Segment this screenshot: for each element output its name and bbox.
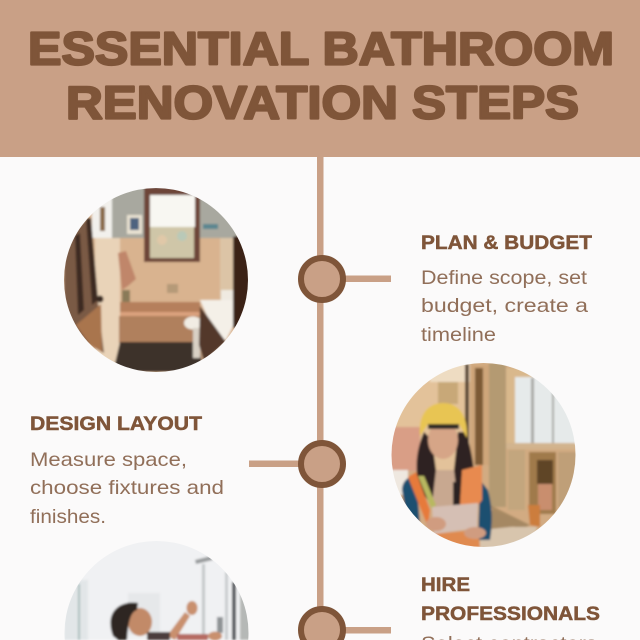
header band <box>0 0 640 157</box>
title: ESSENTIAL BATHROOM <box>28 22 614 74</box>
step 3: hire professionals: PROFESSIONALS <box>421 603 600 625</box>
step 2: design layout: DESIGN LAYOUT <box>30 413 202 435</box>
step 3: hire professionals: HIRE <box>421 574 470 596</box>
node 2 <box>301 443 343 485</box>
step 1: plan and budget: PLAN & BUDGET <box>421 232 592 254</box>
step 1: plan and budget: budget, create a <box>421 295 588 317</box>
photo: contractor with hard hat <box>388 360 580 550</box>
step 2: design layout: Measure space, <box>30 449 187 471</box>
title <box>28 22 614 128</box>
step 1: plan and budget: Define scope, set <box>421 267 588 289</box>
step 1: plan and budget <box>421 232 592 346</box>
timeline <box>249 157 391 640</box>
connector 3 <box>345 627 391 634</box>
node 3 <box>301 609 343 640</box>
connector 2 <box>249 460 301 467</box>
step 3: hire professionals <box>421 574 600 640</box>
photo: plumber installing shower <box>60 538 255 640</box>
step 1: plan and budget: timeline <box>421 324 496 346</box>
step 2: design layout: finishes. <box>30 506 106 528</box>
step 2: design layout <box>30 413 224 528</box>
step 2: design layout: choose fixtures and <box>30 477 224 499</box>
photo: dated bathroom <box>60 185 255 375</box>
node 1 <box>301 258 343 300</box>
connector 1 <box>345 276 391 282</box>
title: RENOVATION STEPS <box>66 76 579 128</box>
